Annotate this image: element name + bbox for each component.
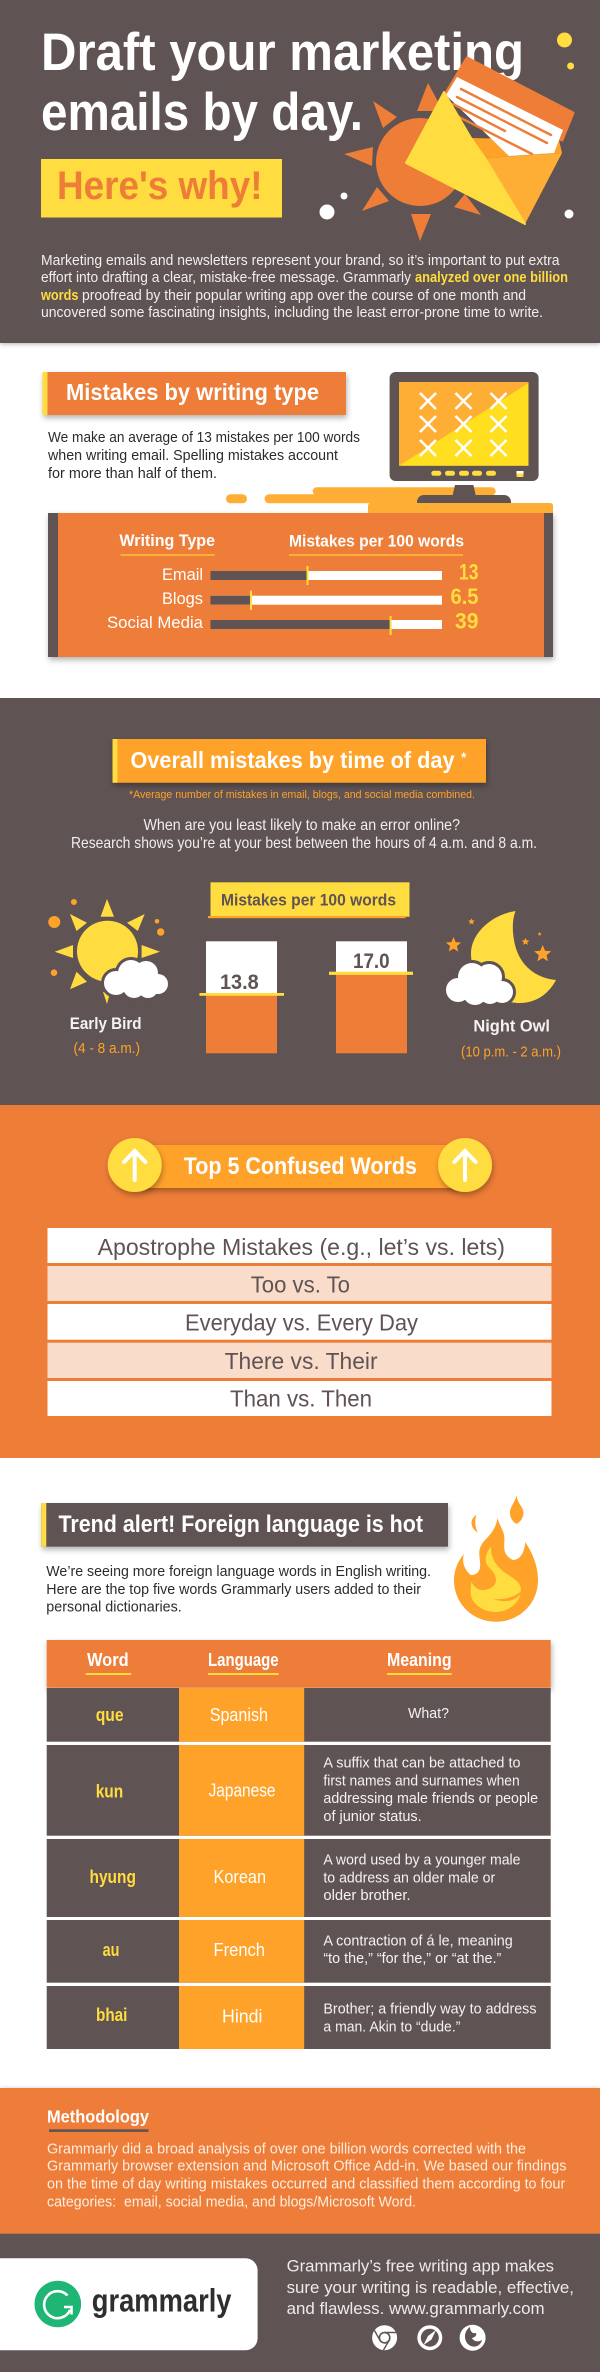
list: Everyday vs. Every Day xyxy=(185,1310,418,1336)
body text: We’re seeing more foreign language words in English writing. xyxy=(46,1563,431,1580)
row: hyung: older brother. xyxy=(323,1888,411,1904)
title xyxy=(41,23,524,142)
bar: night owl 17.0 xyxy=(329,941,413,1053)
heading xyxy=(41,1503,448,1547)
bar: early bird 13.8 xyxy=(199,941,284,1053)
panel: mistakes by writing type xyxy=(42,372,553,657)
row: hyung xyxy=(47,1839,551,1917)
panel: hero header xyxy=(0,0,600,343)
row: hyung: A word used by a younger male xyxy=(323,1852,520,1868)
label: early bird: (4 - 8 a.m.) xyxy=(74,1040,140,1057)
table header: Word xyxy=(87,1650,129,1670)
bar: early bird 13.8: 13.8 xyxy=(220,971,259,994)
heading: Overall mistakes by time of day xyxy=(130,747,454,773)
heading xyxy=(42,372,346,415)
row: kun: first names and surnames when xyxy=(323,1773,520,1789)
row: hyung: hyung xyxy=(90,1867,136,1887)
body text: We make an average of 13 mistakes per 100 words xyxy=(48,429,360,446)
table header: Meaning xyxy=(387,1650,452,1670)
row: au: French xyxy=(214,1940,265,1960)
chart label: Mistakes per 100 words xyxy=(221,891,396,910)
row: social media: 39 xyxy=(455,609,478,634)
call to action text: sure your writing is readable, effective, xyxy=(287,2278,574,2297)
body text xyxy=(47,429,360,482)
row: kun xyxy=(47,1745,551,1836)
icon: monitor xyxy=(390,372,539,481)
call to action text xyxy=(287,2257,574,2318)
label: night owl: (10 p.m. - 2 a.m.) xyxy=(461,1044,561,1061)
logo card: grammarly xyxy=(92,2283,232,2319)
row: social media: Social Media xyxy=(107,613,204,632)
icon: flame xyxy=(454,1495,538,1622)
row: au xyxy=(47,1920,551,1983)
panel: top 5 confused words xyxy=(0,1105,600,1458)
column headings: Writing Type xyxy=(119,531,215,550)
icon: sun with cloud xyxy=(48,899,168,1004)
intro text: Research shows you’re at your best between the hours of 4 a.m. and 8 a.m. xyxy=(71,835,537,852)
label: night owl xyxy=(461,1017,561,1061)
row: kun: Japanese xyxy=(209,1781,276,1801)
icon: open envelope xyxy=(406,58,573,224)
icon: grammarly logo xyxy=(34,2281,81,2327)
bar: night owl 17.0: 17.0 xyxy=(353,950,390,973)
row: kun: A suffix that can be attached to xyxy=(323,1755,520,1771)
title: Draft your marketing xyxy=(41,23,524,82)
row: kun: kun xyxy=(96,1781,123,1801)
row: que: What? xyxy=(408,1706,449,1722)
heading: Mistakes by writing type xyxy=(66,379,319,405)
methodology text: Grammarly did a broad analysis of over one billion words corrected with the xyxy=(47,2140,526,2157)
icon: left arrow xyxy=(124,1151,145,1180)
call to action text: Grammarly’s free writing app makes xyxy=(287,2257,554,2276)
row: social media xyxy=(107,609,478,635)
table header: Language xyxy=(208,1650,279,1670)
row: email: Email xyxy=(162,565,203,584)
call to action text: and flawless. www.grammarly.com xyxy=(287,2299,545,2318)
intro paragraph: uncovered some fascinating insights, including the least error-prone time to write. xyxy=(41,305,543,321)
icon: chrome xyxy=(372,2325,397,2350)
icon: right arrow xyxy=(454,1151,476,1180)
footnote: *Average number of mistakes in email, blogs, and social media combined. xyxy=(129,789,475,801)
row: blogs: 6.5 xyxy=(450,584,478,609)
row: hyung: Korean xyxy=(214,1867,266,1887)
list: Apostrophe Mistakes (e.g., let’s vs. lets) xyxy=(98,1234,505,1260)
list: There vs. Their xyxy=(225,1348,378,1374)
heading banner: Top 5 Confused Words xyxy=(184,1153,417,1180)
row: au: “to the,” “for the,” or “at the.” xyxy=(323,1951,501,1967)
body text: Here are the top five words Grammarly users added to their xyxy=(46,1581,421,1598)
methodology text xyxy=(47,2140,566,2211)
row: bhai: Brother; a friendly way to address xyxy=(323,2001,536,2017)
heading: Trend alert! Foreign language is hot xyxy=(58,1511,423,1538)
row: email xyxy=(162,559,478,585)
body text xyxy=(46,1563,431,1616)
label: night owl: Night Owl xyxy=(473,1017,550,1036)
row: bhai: bhai xyxy=(96,2005,127,2025)
intro paragraph: Marketing emails and newsletters represent your brand, so it’s important to put extra xyxy=(41,253,560,269)
icon: moon with cloud xyxy=(446,911,556,1005)
row: au: au xyxy=(103,1940,119,1960)
heading banner xyxy=(108,1138,492,1192)
title: emails by day. xyxy=(41,83,363,142)
panel: methodology xyxy=(0,2088,600,2234)
label: early bird: Early Bird xyxy=(70,1014,142,1033)
logo card xyxy=(0,2258,258,2350)
row: kun: addressing male friends or people xyxy=(323,1791,538,1807)
decorative dots xyxy=(320,32,574,220)
intro paragraph: proofread by their popular writing app over the course of one month and xyxy=(82,288,526,304)
methodology text: on the time of day writing mistakes occurred and classified them according to four xyxy=(47,2176,565,2193)
column headings xyxy=(119,531,464,556)
intro paragraph xyxy=(40,253,568,321)
row: bhai: Hindi xyxy=(222,2007,262,2027)
intro paragraph: words xyxy=(40,288,78,304)
bar chart panel xyxy=(48,503,553,657)
list: Than vs. Then xyxy=(230,1386,372,1412)
icon: firefox xyxy=(460,2325,486,2351)
intro text xyxy=(71,817,537,852)
row: que: que xyxy=(96,1705,124,1725)
row: email: 13 xyxy=(459,559,478,584)
heading xyxy=(112,739,486,783)
list: Too vs. To xyxy=(251,1272,350,1298)
row: blogs: Blogs xyxy=(162,589,203,608)
row: que xyxy=(47,1688,551,1742)
body text: for more than half of them. xyxy=(48,465,217,482)
chart label xyxy=(208,882,410,918)
row: hyung: to address an older male or xyxy=(323,1870,495,1886)
row: blogs xyxy=(162,584,478,610)
intro text: When are you least likely to make an error online? xyxy=(144,817,460,834)
list xyxy=(48,1228,552,1416)
methodology text: categories: email, social media, and blogs/Microsoft Word. xyxy=(47,2194,416,2211)
subtitle badge xyxy=(41,159,282,218)
row: kun: of junior status. xyxy=(323,1809,422,1825)
panel: footer xyxy=(0,2234,600,2372)
label: early bird xyxy=(70,1014,142,1057)
desk stripes xyxy=(226,485,553,513)
row: que: Spanish xyxy=(210,1705,268,1725)
panel: overall mistakes by time of day xyxy=(0,698,600,1105)
icon: sun xyxy=(344,83,481,241)
row: bhai xyxy=(47,1986,551,2049)
methodology text: Grammarly browser extension and Microsoft Office Add-in. We based our findings xyxy=(47,2158,566,2175)
table xyxy=(47,1640,551,2049)
body text: personal dictionaries. xyxy=(46,1599,182,1616)
subtitle badge: Here's why! xyxy=(57,164,262,208)
row: au: A contraction of á le, meaning xyxy=(323,1934,513,1950)
icon: safari xyxy=(417,2325,442,2350)
row: bhai: a man. Akin to “dude.” xyxy=(323,2019,461,2035)
heading: * xyxy=(461,749,467,765)
intro paragraph: effort into drafting a clear, mistake-free message. Grammarly xyxy=(41,270,412,286)
body text: when writing email. Spelling mistakes account xyxy=(47,447,339,464)
table header xyxy=(47,1640,551,1688)
methodology heading: Methodology xyxy=(47,2106,149,2126)
panel: foreign language trend xyxy=(41,1495,551,2049)
intro paragraph: analyzed over one billion xyxy=(415,270,568,286)
column headings: Mistakes per 100 words xyxy=(289,532,464,550)
